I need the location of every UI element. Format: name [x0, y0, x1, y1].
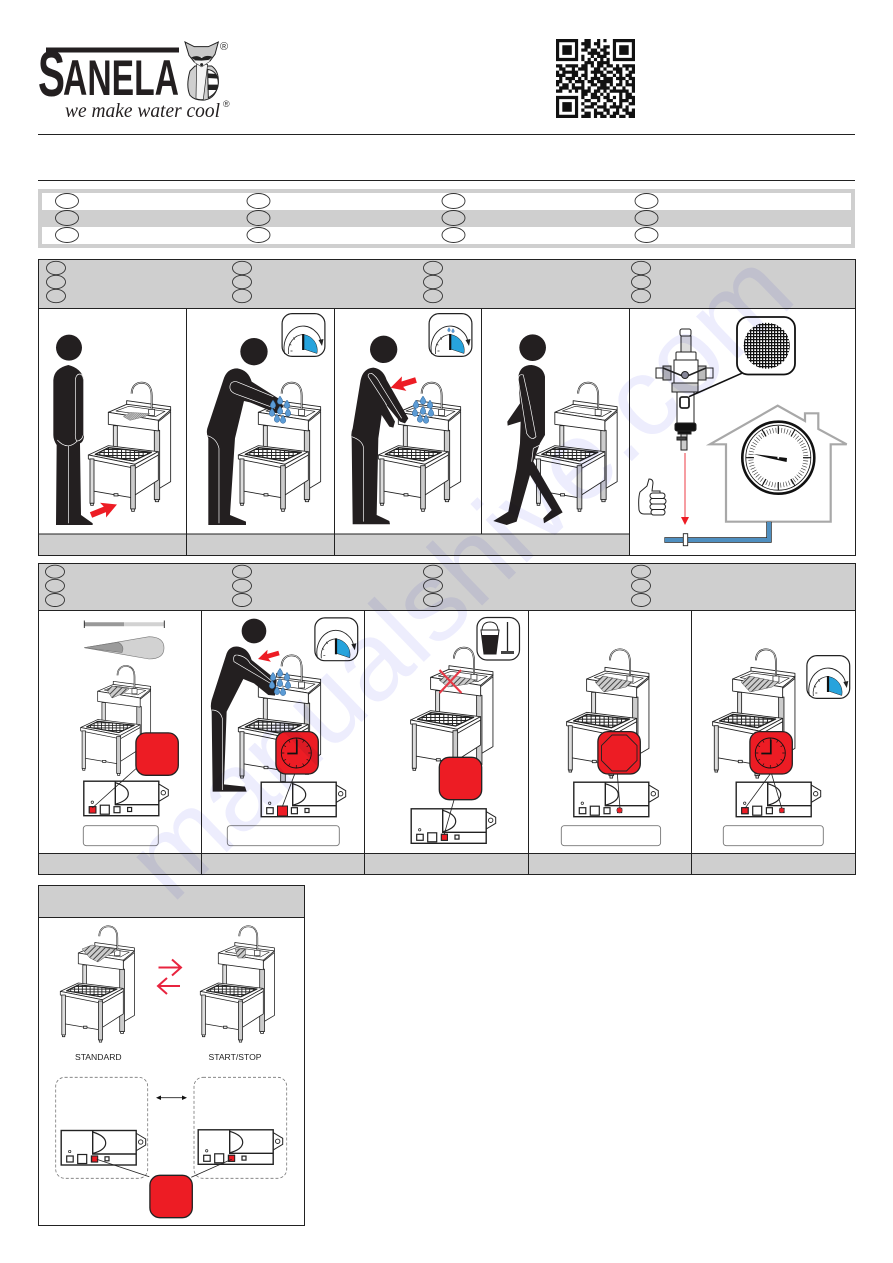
- logo: Sanela: [38, 38, 230, 122]
- language table: [38, 189, 855, 248]
- panel E: timed stop: [713, 649, 850, 846]
- label: standard: STANDARD: [75, 1052, 122, 1062]
- panel C: cleaning mode: [411, 618, 520, 843]
- panel 1: step on pedal: [53, 335, 171, 525]
- double arrow: [156, 1096, 187, 1100]
- dashed boxes: [56, 1077, 287, 1178]
- icon: pressure gauge: [742, 422, 814, 494]
- logo mascot: raccoon: [185, 42, 218, 100]
- section 2 panels frame: [38, 610, 856, 874]
- logo: Sanela: S: [38, 38, 65, 110]
- sensor cone: [84, 637, 164, 659]
- icon: bucket and mop: [477, 618, 520, 660]
- logo: Sanela: ANELA: [63, 50, 179, 106]
- panel 4: walk away: [493, 334, 617, 525]
- watermark: manualshive.com: [102, 227, 816, 922]
- icon: house: [710, 406, 847, 522]
- icon: water pipe: [664, 522, 769, 546]
- arrow: flushing down: [681, 453, 689, 525]
- panel 5: filter and house pressure: [639, 317, 847, 546]
- QR code: [556, 41, 635, 116]
- arrows: swap: [158, 960, 181, 994]
- panel 2: wash hands: [207, 314, 325, 525]
- logo: Sanela: ®: [220, 41, 228, 53]
- section 3: mode switch panel: [38, 886, 304, 1226]
- icon: stop octagon: [602, 735, 637, 771]
- start/stop sink: [200, 926, 274, 1042]
- logo: Sanela: ®: [223, 99, 230, 109]
- section 2 header: [38, 564, 856, 610]
- panel 3: rinse hands: [351, 314, 472, 524]
- icon: filter: [656, 329, 713, 450]
- red cross: [440, 670, 462, 693]
- icon: mesh magnifier: [689, 317, 795, 397]
- icon: thumbs up: [639, 479, 666, 515]
- section 1 panels frame: [38, 308, 856, 556]
- range scale: [84, 620, 164, 628]
- standard sink: [60, 926, 134, 1042]
- tagline: we make water cool: [65, 100, 220, 122]
- panel A: range setting: [81, 620, 178, 846]
- section 1 header: [38, 260, 856, 308]
- panel D: stop: [561, 649, 661, 846]
- panel B: timed flow: [211, 618, 358, 846]
- label: start/stop: START/STOP: [208, 1052, 262, 1062]
